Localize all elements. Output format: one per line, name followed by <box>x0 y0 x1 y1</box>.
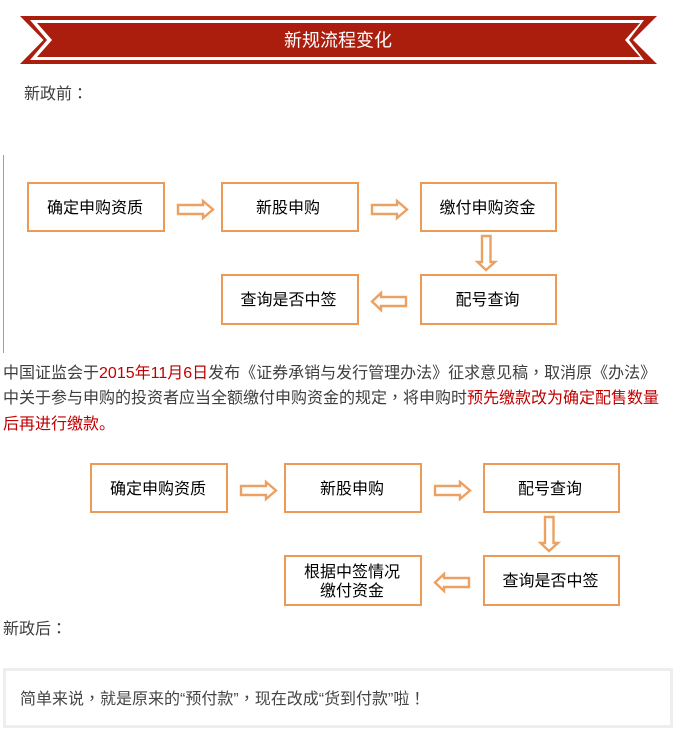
step: 配号查询 <box>421 275 556 324</box>
left rule beside first flowchart <box>3 155 4 353</box>
explanatory paragraph <box>3 359 659 433</box>
step: 配号查询: 配号查询 <box>455 291 520 309</box>
arrow: left <box>372 293 406 310</box>
step: 配号查询 <box>484 464 619 512</box>
arrow: down <box>478 236 495 270</box>
step: 查询是否中签 <box>484 556 619 605</box>
heading: before the new policy: 新政前： <box>24 80 88 104</box>
heading: after the new policy: 新政后： <box>3 615 67 639</box>
step: 确定申购资质: 确定申购资质 <box>110 480 206 498</box>
step: 确定申购资质 <box>28 183 164 231</box>
step: 新股申购: 新股申购 <box>256 199 320 217</box>
step: 新股申购 <box>222 183 358 231</box>
step: 查询是否中签 <box>222 275 358 324</box>
step: 查询是否中签: 查询是否中签 <box>240 291 337 309</box>
explanatory paragraph: 中关于参与申购的投资者应当全额缴付申购资金的规定，将申购时预先缴款改为确定配售数量 <box>3 384 659 408</box>
step: 根据中签情况缴付资金 <box>285 556 421 605</box>
explanatory paragraph: 中国证监会于2015年11月6日发布《证券承销与发行管理办法》征求意见稿，取消原《办法》 <box>3 359 656 383</box>
step: 缴付申购资金 <box>421 183 556 231</box>
arrow: right <box>241 482 276 499</box>
step: 确定申购资质 <box>91 464 227 512</box>
title banner: 新规流程变化 <box>284 30 392 50</box>
step: 查询是否中签: 查询是否中签 <box>502 572 599 590</box>
callout: summary <box>3 668 673 728</box>
arrow: right <box>178 201 213 218</box>
arrow: right <box>372 201 407 218</box>
step: 新股申购 <box>285 464 421 512</box>
step: 新股申购: 新股申购 <box>320 480 384 498</box>
title banner <box>20 16 657 64</box>
step: 配号查询: 配号查询 <box>518 480 582 498</box>
step: 根据中签情况缴付资金: 缴付资金 <box>320 582 384 600</box>
arrow: left <box>435 574 469 591</box>
callout text: 简单来说，就是原来的“预付款”，现在改成“货到付款”啦！ <box>20 685 425 709</box>
step: 确定申购资质: 确定申购资质 <box>47 199 143 217</box>
arrow: right <box>435 482 470 499</box>
step: 根据中签情况缴付资金: 根据中签情况 <box>304 563 400 581</box>
arrow: down <box>540 517 558 551</box>
explanatory paragraph: 后再进行缴款。 <box>3 416 115 433</box>
step: 缴付申购资金: 缴付申购资金 <box>439 199 536 217</box>
